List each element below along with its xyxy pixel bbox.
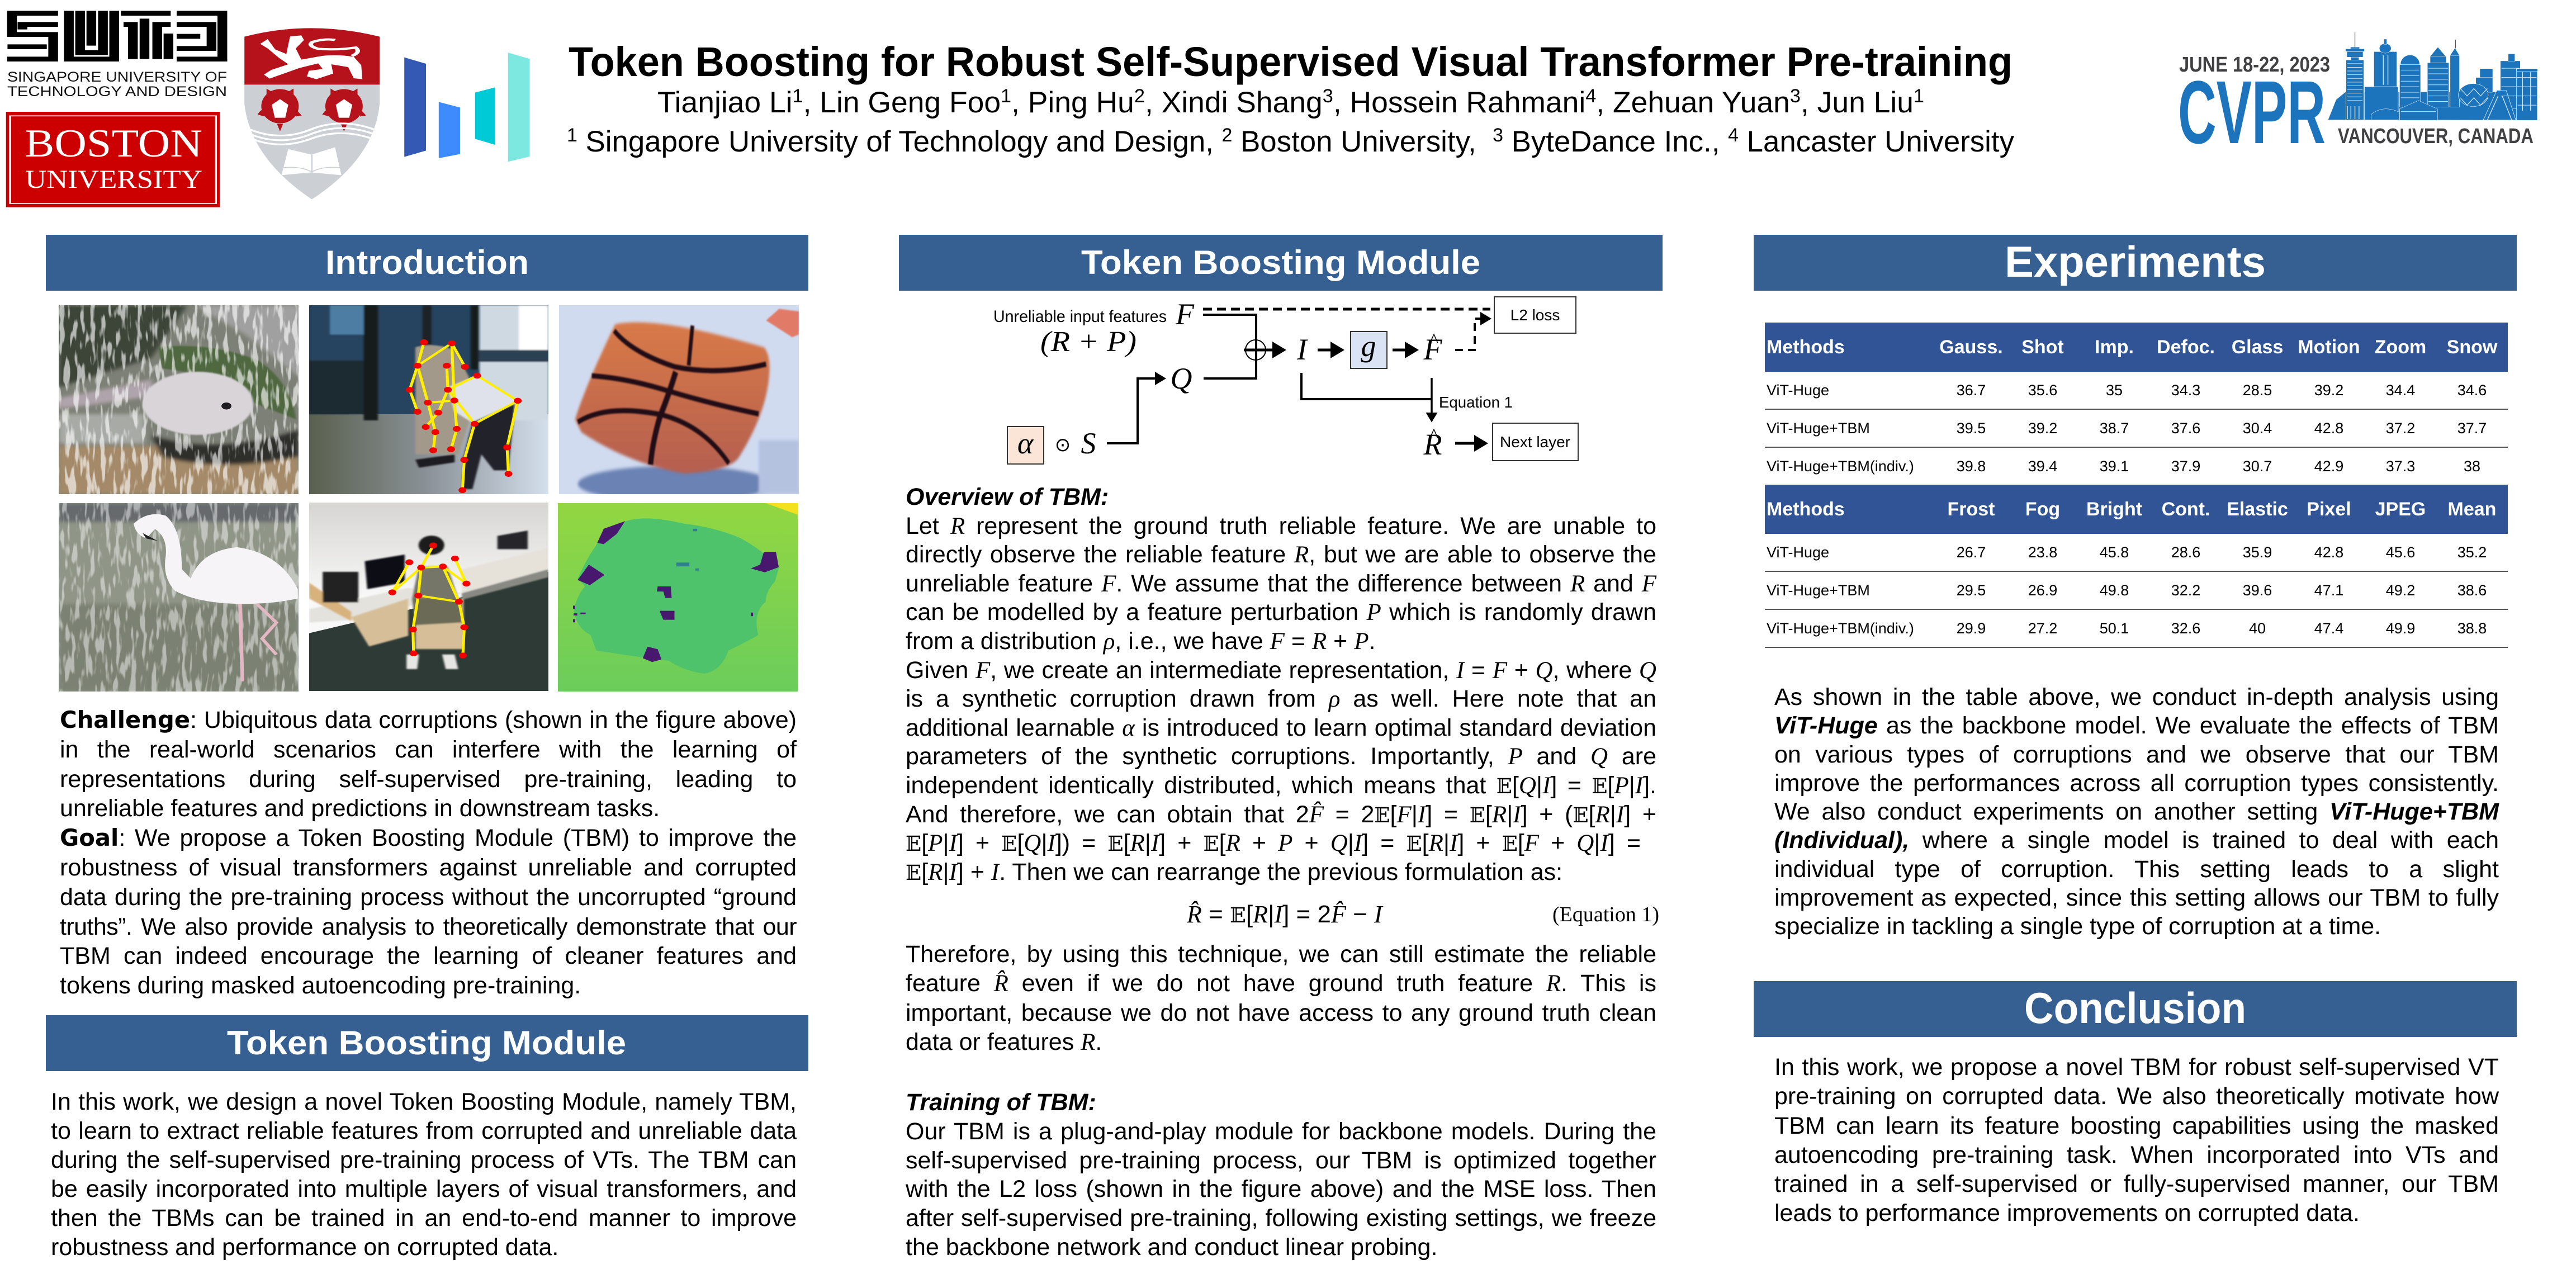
text: experiment analysis: (Individual), where a single model is trained to deal with each: [1774, 827, 2499, 854]
text: challenge and goal: representations during self-supervised pre-training, leading to: [60, 766, 797, 793]
table: remaining corruptions and mean: 42.8: [2314, 543, 2343, 560]
table: first eight corruptions: 39.2: [2028, 419, 2057, 436]
heading: Introduction: [46, 235, 808, 291]
text: training of TBM: self-supervised pre-training process, our TBM is optimized together: [906, 1147, 1656, 1174]
label: unreliable input features: F: [1175, 297, 1195, 331]
variables: ^: [1429, 424, 1439, 447]
text: challenge and goal: robustness of visual transformers against unreliable and corrupted: [60, 854, 797, 881]
text: overview of TBM: from a distribution ρ, i.e., we have F = R + P.: [906, 628, 1375, 655]
text: module summary: [51, 1087, 797, 1262]
table: remaining corruptions and mean: 23.8: [2028, 543, 2057, 560]
table: remaining corruptions and mean: Bright: [2086, 499, 2142, 520]
label: equation 1: Equation 1: [1439, 394, 1513, 411]
table: first eight corruptions: Gauss.: [1939, 337, 2003, 358]
learnable alpha box: ⊙: [1055, 434, 1071, 456]
affiliations: Lancaster University: [1739, 125, 2014, 158]
table: first eight corruptions: Imp.: [2095, 337, 2134, 358]
title: Token Boosting for Robust Self-Supervised Visual Transformer Pre-training: [569, 39, 2012, 85]
arrows: signal paths: [1107, 309, 1490, 443]
logo text: SUTD and Boston University names: UNIVERSITY: [25, 165, 202, 194]
text: experiment analysis: [1774, 683, 2499, 941]
logo text: SUTD and Boston University names: TECHNOLOGY AND DESIGN: [7, 84, 227, 100]
variables: [1171, 329, 1442, 461]
text: estimating reliable feature: Therefore, by using this technique, we can still estimate the reliable: [906, 941, 1656, 968]
table: first eight corruptions: 39.5: [1957, 419, 1986, 436]
text: challenge and goal: data during the pre-training process without the uncorrupted “ground: [60, 884, 797, 911]
variables: R: [1423, 428, 1442, 461]
text: overview of TBM: And therefore, we can obtain that 2F̂ = 2𝔼[F|I] = 𝔼[R|I] + (𝔼[R|I] +: [906, 801, 1656, 828]
table: remaining corruptions and mean: 27.2: [2028, 619, 2057, 636]
authors: , Ping Hu: [1011, 86, 1134, 119]
text: estimating reliable feature: data or features R.: [906, 1029, 1102, 1055]
table: first eight corruptions: 28.5: [2243, 381, 2272, 398]
text: training of TBM: with the L2 loss (shown in the figure above) and the MSE loss. Then: [906, 1176, 1656, 1202]
table: first eight corruptions: 35: [2106, 381, 2123, 398]
table: first eight corruptions: Motion: [2298, 337, 2360, 358]
table: first eight corruptions: 39.8: [1957, 457, 1986, 474]
table: first eight corruptions: 39.4: [2028, 457, 2057, 474]
authors: Tianjiao Li: [657, 86, 792, 119]
table: first eight corruptions: 34.4: [2386, 381, 2415, 398]
table: first eight corruptions: 30.4: [2243, 419, 2272, 436]
table: remaining corruptions and mean: 35.9: [2243, 543, 2272, 560]
authors: , Xindi Shang: [1145, 86, 1323, 119]
table: first eight corruptions: 38.7: [2100, 419, 2129, 436]
table: first eight corruptions: Shot: [2021, 337, 2064, 358]
table: remaining corruptions and mean: 47.1: [2314, 581, 2343, 598]
table: first eight corruptions: ViT-Huge+TBM(indiv.): [1767, 457, 1914, 474]
image: corruption heat map: [558, 503, 798, 692]
text: conclusion: pre-training on corrupted data. We also theoretically motivate how: [1774, 1083, 2499, 1110]
table: first eight corruptions: 38: [2464, 457, 2480, 474]
table: first eight corruptions: Zoom: [2375, 337, 2426, 358]
text: challenge and goal: Goal: We propose a Token Boosting Module (TBM) to improve the: [60, 824, 797, 851]
heading: Conclusion: Conclusion: [2024, 983, 2246, 1033]
table: remaining corruptions and mean: 40: [2249, 619, 2266, 636]
table: first eight corruptions: 35.6: [2028, 381, 2057, 398]
table: first eight corruptions: [1765, 323, 2508, 485]
text: challenge and goal: [60, 705, 797, 1001]
text: module summary: In this work, we design a novel Token Boosting Module, namely TBM,: [51, 1088, 797, 1115]
panel: token boosting module details: [899, 235, 1663, 1263]
text: overview of TBM: 𝔼[P|I] + 𝔼[Q|I]) = 𝔼[R|I] + 𝔼[R + P + Q|I] = 𝔼[R|I] + 𝔼[F + Q|I] =: [906, 830, 1641, 856]
text: challenge and goal: truths”. We also provide analysis to theoretically demonstrate that our: [60, 913, 797, 940]
text: conclusion: trained in a self-supervised or fully-supervised manner, our TBM: [1774, 1171, 2499, 1197]
label: unreliable input features: Unreliable input features: [993, 307, 1167, 326]
text: training of TBM: Our TBM is a plug-and-play module for backbone models. During the: [906, 1118, 1656, 1145]
figure: corrupted data examples: [59, 305, 799, 692]
learnable alpha box: [1007, 427, 1096, 464]
table: remaining corruptions and mean: 47.4: [2314, 619, 2343, 636]
text: overview of TBM: additional learnable α is introduced to learn optimal standard deviation: [906, 714, 1656, 741]
text: estimating reliable feature: important, because we do not have access to any ground truth clean: [906, 1000, 1656, 1026]
table: first eight corruptions: ViT-Huge+TBM: [1767, 419, 1870, 436]
authors: 1: [1914, 86, 1924, 107]
table: first eight corruptions: 36.7: [1957, 381, 1986, 398]
image: flamingo in rain: [59, 503, 299, 692]
next layer box: [1493, 423, 1578, 461]
text: overview of TBM: directly observe the reliable feature R, but we are able to observe the: [906, 541, 1656, 568]
table: remaining corruptions and mean: 28.6: [2171, 543, 2200, 560]
tables: results by corruption type: [1765, 323, 2508, 647]
authors: , Zehuan Yuan: [1596, 86, 1790, 119]
module g box: g: [1361, 329, 1376, 363]
next layer box: Next layer: [1500, 433, 1570, 451]
table: remaining corruptions and mean: 35.2: [2457, 543, 2487, 560]
variables: F: [1423, 333, 1442, 366]
logo: ByteDance bars: [404, 53, 530, 162]
panel: token boosting module summary: [46, 1015, 808, 1267]
table: remaining corruptions and mean: 49.8: [2100, 581, 2129, 598]
text: overview of TBM: can be modelled by a feature perturbation P which is randomly drawn: [906, 599, 1656, 626]
text: module summary: during the self-supervised pre-training process of VTs. The TBM can: [51, 1147, 797, 1173]
variables: ^: [1429, 329, 1439, 352]
table: remaining corruptions and mean: ViT-Huge+TBM: [1767, 581, 1870, 598]
table: remaining corruptions and mean: 45.8: [2100, 543, 2129, 560]
text: experiment analysis: improvement as expected, since this setting allows our TBM to fully: [1774, 884, 2499, 911]
text: experiment analysis: As shown in the table above, we conduct in-depth analysis using: [1774, 684, 2499, 711]
text: overview of TBM: Given F, we create an intermediate representation, I = F + Q, where Q: [906, 657, 1656, 684]
text: experiment analysis: ViT-Huge as the backbone model. We evaluate the effects of TBM: [1774, 712, 2499, 739]
affiliations: ByteDance Inc.,: [1503, 125, 1728, 158]
table: first eight corruptions: Methods: [1767, 337, 1845, 358]
table: first eight corruptions: 42.9: [2314, 457, 2343, 474]
table: first eight corruptions: 37.6: [2171, 419, 2200, 436]
affiliations: 2: [1222, 125, 1232, 146]
affiliations: Singapore University of Technology and Design,: [577, 125, 1222, 158]
equation 1: R̂ = 𝔼[R|I] = 2F̂ − I: [1187, 901, 1382, 928]
table: remaining corruptions and mean: Mean: [2448, 499, 2496, 520]
table: remaining corruptions and mean: 29.9: [1957, 619, 1986, 636]
table: remaining corruptions and mean: 26.9: [2028, 581, 2057, 598]
table: remaining corruptions and mean: 32.6: [2171, 619, 2200, 636]
label: unreliable input features: [993, 297, 1195, 358]
table: first eight corruptions: 39.2: [2314, 381, 2343, 398]
text: estimating reliable feature: [906, 940, 1656, 1056]
authors: , Lin Geng Foo: [803, 86, 1001, 119]
table: remaining corruptions and mean: JPEG: [2375, 499, 2426, 520]
authors: 2: [1134, 86, 1145, 107]
table: remaining corruptions and mean: 39.6: [2243, 581, 2272, 598]
L2 loss box: L2 loss: [1510, 306, 1560, 324]
table: remaining corruptions and mean: 50.1: [2100, 619, 2129, 636]
text: training of TBM: Training of TBM:: [906, 1089, 1096, 1116]
image: bird in rain: [59, 305, 299, 494]
table: remaining corruptions and mean: 49.2: [2386, 581, 2415, 598]
table: first eight corruptions: 37.3: [2386, 457, 2415, 474]
image: blurred basketball: [559, 305, 799, 494]
affiliations: Boston University,: [1232, 125, 1493, 158]
table: remaining corruptions and mean: 26.7: [1957, 543, 1986, 560]
equation 1: (Equation 1): [1552, 903, 1659, 926]
affiliations: 3: [1493, 125, 1503, 146]
text: overview of TBM: Let R represent the ground truth reliable feature. We are unable to: [906, 513, 1656, 539]
panel: experiments: [1754, 235, 2517, 962]
table: first eight corruptions: 42.8: [2314, 419, 2343, 436]
table: remaining corruptions and mean: Frost: [1948, 499, 1995, 520]
text: experiment analysis: individual type of corruption. This setting leads to a slight: [1774, 856, 2499, 883]
text: overview of TBM: 𝔼[R|I] + I. Then we can rearrange the previous formulation as:: [906, 859, 1562, 886]
table: first eight corruptions: ViT-Huge: [1767, 381, 1829, 398]
learnable alpha box: α: [1017, 427, 1034, 460]
text: training of TBM: after self-supervised pre-training, following existing settings, we freeze: [906, 1205, 1656, 1232]
header banner: [6, 11, 2537, 207]
variables: I: [1296, 333, 1309, 366]
image: two people with pose skeletons: [309, 305, 548, 494]
heading: Token Boosting Module: [899, 235, 1663, 291]
text: challenge and goal: tokens during masked autoencoding pre-training.: [60, 972, 581, 999]
text: training of TBM: [906, 1088, 1656, 1262]
affiliations: 1: [567, 125, 577, 146]
table: remaining corruptions and mean: ViT-Huge+TBM(indiv.): [1767, 619, 1914, 636]
logo: Boston University box: [6, 112, 220, 207]
table: first eight corruptions: 34.3: [2171, 381, 2200, 398]
text: experiment analysis: on various types of corruptions and we observe that our TBM: [1774, 741, 2499, 768]
table: remaining corruptions and mean: 38.8: [2457, 619, 2487, 636]
text: module summary: robustness and performance on corrupted data.: [51, 1234, 558, 1261]
heading: Experiments: [1754, 235, 2517, 291]
text: conclusion: [1774, 1053, 2499, 1228]
logo text: SUTD and Boston University names: BOSTON: [25, 122, 202, 165]
text: experiment analysis: improve the performances across all corruption types consistently.: [1774, 770, 2499, 797]
authors: 3: [1790, 86, 1801, 107]
logo text: SUTD and Boston University names: [7, 69, 227, 194]
table: first eight corruptions: 37.9: [2171, 457, 2200, 474]
affiliations: 4: [1728, 125, 1739, 146]
text: challenge and goal: unreliable features and predictions in downstream tasks.: [60, 795, 660, 822]
text: training of TBM: the backbone network and conduct linear probing.: [906, 1234, 1437, 1261]
module g box: [1351, 329, 1387, 368]
table: remaining corruptions and mean: Elastic: [2227, 499, 2288, 520]
table: remaining corruptions and mean: [1765, 485, 2508, 648]
text: experiment analysis: specialize in tackling a single type of corruption at a time.: [1774, 913, 2381, 940]
diagram: TBM architecture: [978, 296, 1593, 470]
logo: CVPR 2023 Vancouver: JUNE 18-22, 2023: [2179, 53, 2330, 77]
table: remaining corruptions and mean: ViT-Huge: [1767, 543, 1829, 560]
heading: Experiments: Experiments: [2005, 237, 2266, 286]
authors: 1: [793, 86, 803, 107]
logo: SUTD maze mark: [7, 11, 222, 59]
text: conclusion: TBM can learn its feature boosting capabilities using the masked: [1774, 1112, 2499, 1139]
table: remaining corruptions and mean: 29.5: [1957, 581, 1986, 598]
text: challenge and goal: in the real-world scenarios can interfere with the learning of: [60, 736, 797, 763]
title and authors: [567, 39, 2014, 158]
learnable alpha box: S: [1081, 427, 1096, 460]
table: first eight corruptions: Snow: [2447, 337, 2497, 358]
text: challenge and goal: TBM can indeed encourage the learning of cleaner features and: [60, 943, 797, 969]
authors: 1: [1001, 86, 1011, 107]
variables: Q: [1171, 362, 1192, 395]
heading: Token Boosting Module: Token Boosting Module: [1081, 244, 1480, 281]
table: first eight corruptions: 37.7: [2457, 419, 2487, 436]
table: first eight corruptions: Defoc.: [2157, 337, 2215, 358]
heading: Introduction: Introduction: [325, 244, 529, 281]
text: challenge and goal: Challenge: Ubiquitous data corruptions (shown in the figure above): [60, 706, 797, 733]
text: module summary: be easily incorporated into multiple layers of visual transformers, and: [51, 1176, 797, 1202]
table: remaining corruptions and mean: 38.6: [2457, 581, 2487, 598]
logo: Lancaster University shield: [244, 28, 380, 200]
authors: , Jun Liu: [1801, 86, 1914, 119]
table: remaining corruptions and mean: Fog: [2025, 499, 2060, 520]
text: overview of TBM: [906, 483, 1656, 887]
table: first eight corruptions: 39.1: [2100, 457, 2129, 474]
table: first eight corruptions: 30.7: [2243, 457, 2272, 474]
text: conclusion: autoencoding pre-training task. When incorporated into VTs and: [1774, 1142, 2499, 1168]
text: experiment analysis: We also conduct experiments on another setting ViT-Huge+TBM: [1774, 798, 2499, 825]
panel: conclusion: [1754, 981, 2517, 1249]
table: remaining corruptions and mean: 32.2: [2171, 581, 2200, 598]
panel: introduction: [46, 235, 808, 999]
table: remaining corruptions and mean: Methods: [1767, 499, 1845, 520]
logo text: SUTD and Boston University names: SINGAPORE UNIVERSITY OF: [7, 69, 227, 85]
text: overview of TBM: unreliable feature F. We assume that the difference between R and F: [906, 570, 1656, 597]
heading: Conclusion: [1754, 981, 2517, 1037]
text: conclusion: In this work, we propose a novel TBM for robust self-supervised VT: [1774, 1054, 2499, 1081]
text: overview of TBM: is a synthetic corruption drawn from ρ as well. Here note that an: [906, 685, 1656, 712]
table: remaining corruptions and mean: Cont.: [2162, 499, 2210, 520]
logos: universities and company: [6, 11, 530, 207]
text: conclusion: leads to performance improvements on corrupted data.: [1774, 1200, 2360, 1227]
text: module summary: to learn to extract reliable features from corrupted and unreliable data: [51, 1117, 797, 1144]
authors: 4: [1585, 86, 1596, 107]
heading: Token Boosting Module: Token Boosting Module: [227, 1024, 626, 1062]
table: remaining corruptions and mean: 45.6: [2386, 543, 2415, 560]
text: module summary: then the TBMs can be trained in an end-to-end manner to improve: [51, 1205, 797, 1232]
text: overview of TBM: Overview of TBM:: [906, 484, 1109, 510]
equation 1: [1187, 898, 1656, 931]
L2 loss box: [1494, 297, 1576, 333]
table: first eight corruptions: 37.2: [2386, 419, 2415, 436]
table: remaining corruptions and mean: 49.9: [2386, 619, 2415, 636]
text: overview of TBM: independent identically distributed, which means that 𝔼[Q|I] = 𝔼[P|I].: [906, 772, 1656, 799]
text: estimating reliable feature: feature R̂ even if we do not have ground truth feature R. This is: [906, 970, 1656, 997]
text: overview of TBM: parameters of the synthetic corruptions. Importantly, P and Q are: [906, 743, 1656, 770]
heading: Token Boosting Module: [46, 1015, 808, 1071]
table: first eight corruptions: Glass: [2232, 337, 2283, 358]
authors: 3: [1323, 86, 1333, 107]
logo: CVPR 2023 Vancouver: [2178, 32, 2537, 151]
table: first eight corruptions: 34.6: [2457, 381, 2487, 398]
table: remaining corruptions and mean: Pixel: [2307, 499, 2351, 520]
image: seated person with pose skeleton: [309, 503, 548, 691]
label: unreliable input features: (R + P): [1040, 326, 1137, 358]
authors: , Hossein Rahmani: [1333, 86, 1585, 119]
